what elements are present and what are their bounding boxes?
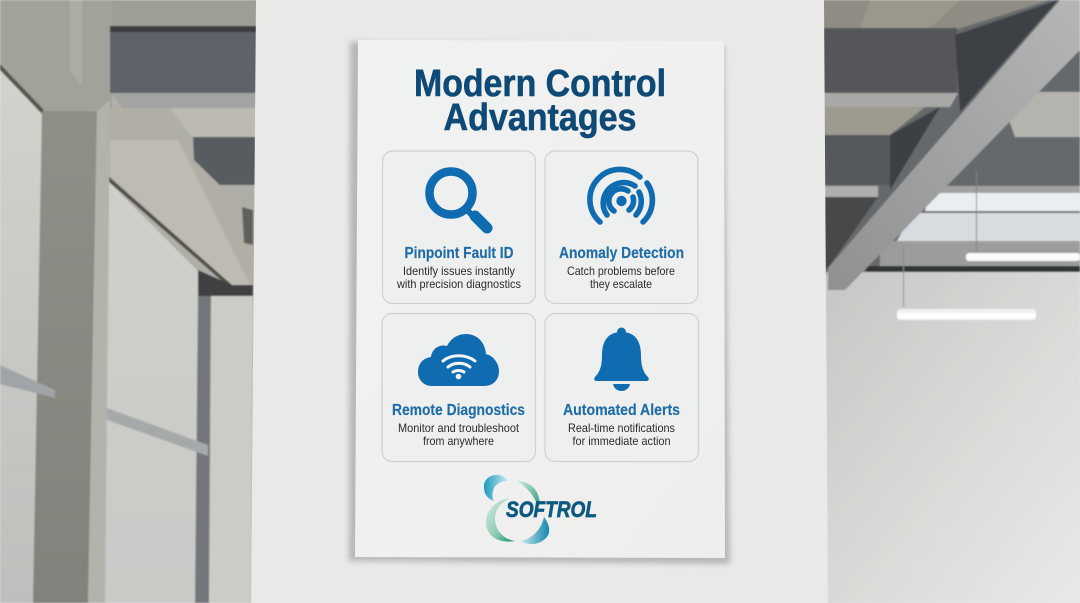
title: Advantages bbox=[444, 97, 636, 139]
panel: pinpoint fault id bbox=[382, 151, 536, 304]
icon: wifi cloud bbox=[418, 334, 499, 386]
title: Modern Control bbox=[414, 63, 666, 105]
heading: remote diagnostics: Remote Diagnostics bbox=[392, 402, 525, 419]
title bbox=[414, 63, 666, 139]
description: remote diagnostics bbox=[398, 421, 520, 448]
description: pinpoint fault id: with precision diagnostics bbox=[396, 277, 521, 291]
icon: magnifying glass bbox=[430, 172, 487, 228]
description: automated alerts bbox=[568, 421, 675, 448]
panel: automated alerts bbox=[545, 314, 698, 462]
description: anomaly detection bbox=[567, 264, 675, 291]
heading: anomaly detection: Anomaly Detection bbox=[559, 245, 684, 262]
description: automated alerts: for immediate action bbox=[572, 434, 670, 448]
description: anomaly detection: Catch problems before bbox=[567, 264, 675, 278]
heading: pinpoint fault id: Pinpoint Fault ID bbox=[404, 245, 514, 262]
panel: anomaly detection bbox=[545, 151, 698, 304]
description: automated alerts: Real-time notifications bbox=[568, 421, 675, 435]
icon: radar signal bbox=[590, 169, 652, 222]
icon: bell bbox=[594, 328, 649, 391]
description: remote diagnostics: from anywhere bbox=[423, 434, 494, 448]
panel: remote diagnostics bbox=[382, 314, 536, 462]
logo: softrol: SOFTROL bbox=[506, 497, 597, 522]
heading: automated alerts: Automated Alerts bbox=[563, 402, 680, 419]
description: anomaly detection: they escalate bbox=[590, 277, 652, 291]
background: warehouse right side bbox=[822, 0, 1080, 603]
logo: softrol bbox=[484, 475, 597, 544]
description: remote diagnostics: Monitor and troubleshoot bbox=[398, 421, 520, 435]
background: warehouse left side bbox=[0, 0, 258, 603]
description: pinpoint fault id bbox=[396, 264, 521, 291]
central wall bbox=[251, 0, 828, 603]
description: pinpoint fault id: Identify issues instantly bbox=[403, 264, 515, 278]
poster bbox=[349, 40, 730, 564]
